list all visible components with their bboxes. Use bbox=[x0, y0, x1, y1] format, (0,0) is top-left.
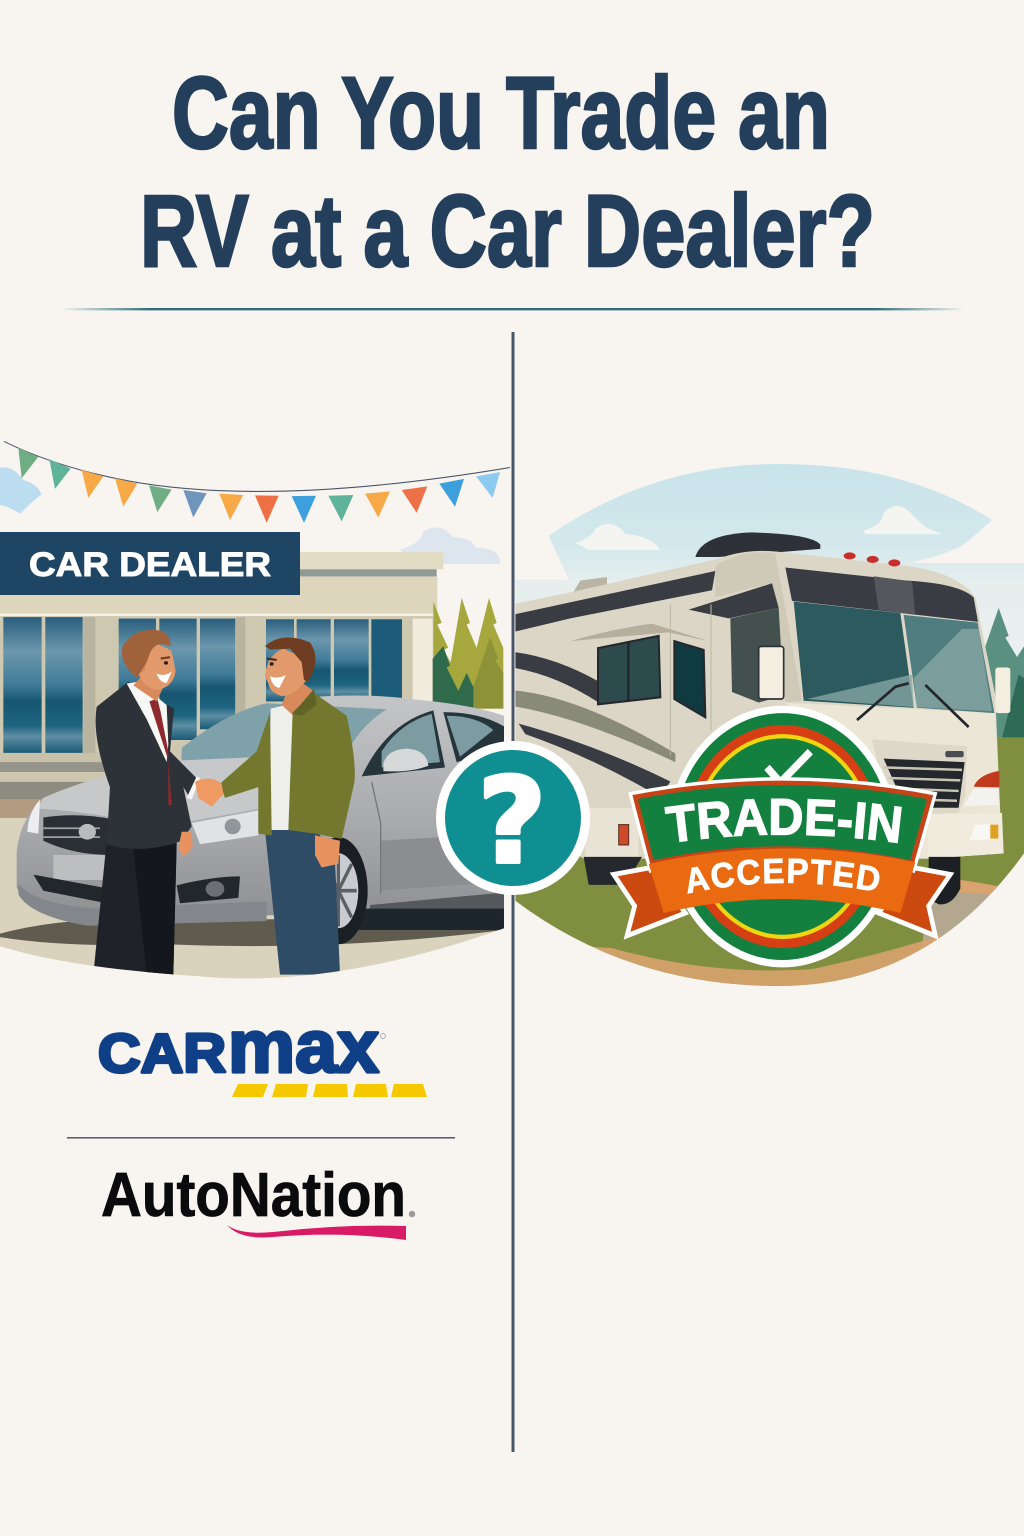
trade-in label: TRADE-IN bbox=[664, 798, 902, 844]
clouds bbox=[0, 467, 501, 564]
seal rings bbox=[668, 706, 898, 967]
logo: AutoNation: AutoNation bbox=[101, 1161, 406, 1230]
title rule bbox=[60, 308, 965, 310]
car dealer sign bbox=[0, 532, 300, 595]
bunting flags bbox=[4, 441, 510, 523]
ground bbox=[0, 818, 512, 990]
title: Can You Trade an bbox=[172, 56, 830, 170]
sky bbox=[516, 464, 1024, 656]
logo: CarMax: max bbox=[228, 1005, 379, 1088]
question badge: ? bbox=[478, 752, 546, 890]
customer in green jacket bbox=[220, 637, 355, 975]
question badge bbox=[436, 741, 590, 895]
car shadow bbox=[0, 919, 504, 946]
pink swoosh bbox=[227, 1225, 406, 1240]
orange banner bbox=[649, 849, 915, 913]
accepted label: ACCEPTED bbox=[687, 858, 880, 894]
dealership building bbox=[0, 552, 443, 818]
logo: CarMax bbox=[98, 1005, 427, 1097]
silver car bbox=[17, 696, 504, 944]
title bbox=[140, 56, 875, 288]
ribbon tails bbox=[614, 867, 950, 936]
logo: CarMax: CAR bbox=[98, 1022, 226, 1084]
check mark bbox=[767, 752, 810, 783]
panel: car dealer scene bbox=[0, 467, 512, 990]
panel: RV scene bbox=[512, 450, 1024, 1000]
dirt road bbox=[877, 886, 998, 970]
car dealer sign: CAR DEALER bbox=[29, 546, 271, 584]
salesman in suit bbox=[93, 630, 200, 975]
green banner bbox=[630, 779, 935, 871]
pine trees bbox=[985, 608, 1024, 738]
meadow bbox=[512, 738, 1024, 1000]
logo separator bbox=[67, 1137, 455, 1139]
motorhome bbox=[512, 532, 1010, 904]
handshake bbox=[195, 779, 223, 807]
trade-in accepted badge bbox=[610, 706, 954, 968]
pine trees bbox=[433, 598, 503, 709]
clouds bbox=[575, 506, 1024, 563]
yellow dashes bbox=[232, 1084, 427, 1097]
center divider bbox=[512, 332, 514, 1452]
